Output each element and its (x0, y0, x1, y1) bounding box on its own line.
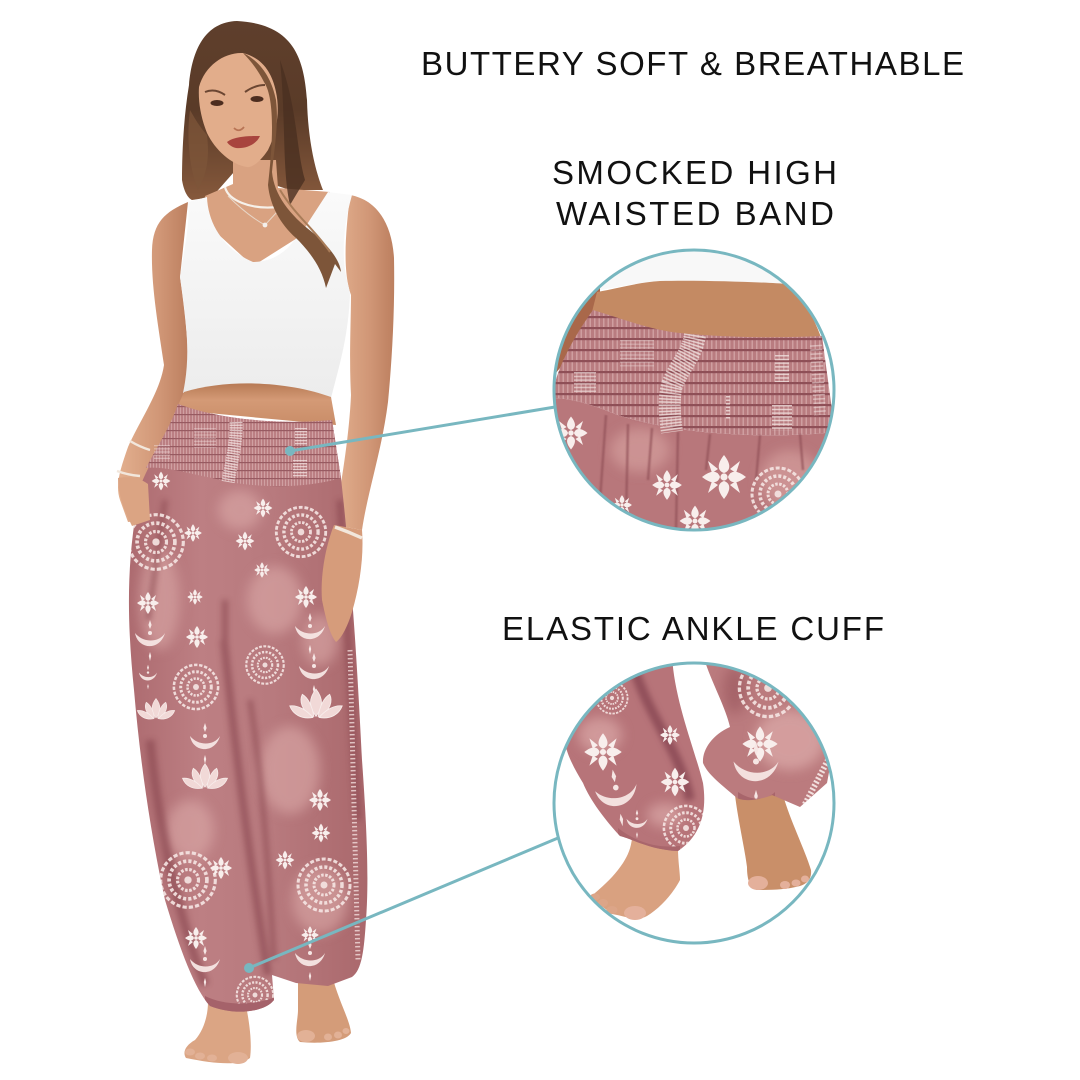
print motifs (129, 472, 350, 1013)
arm behind (556, 288, 600, 372)
smocked waistband (146, 404, 341, 486)
left foot close-up (590, 838, 680, 920)
midriff skin (592, 280, 820, 338)
left foot (184, 1002, 251, 1064)
right hand (322, 525, 363, 642)
model figure (117, 21, 394, 1064)
white crop top (180, 192, 352, 398)
harem pants (129, 404, 367, 1020)
right arm (334, 195, 394, 530)
right foot close-up (735, 795, 811, 890)
mottling and gathers (610, 428, 820, 510)
fabric below band (556, 398, 826, 528)
waistband print (162, 422, 301, 482)
heading: elastic ankle cuff: ELASTIC ANKLE CUFF (502, 610, 884, 647)
right foot (296, 975, 351, 1043)
detail circle: waistband close-up (545, 240, 840, 540)
ankle cuffs (205, 996, 274, 1012)
hair front lock (188, 53, 341, 288)
infographic canvas (116, 21, 963, 1064)
right pant leg (702, 665, 829, 807)
detail circle: ankle cuff close-up (552, 662, 836, 944)
left pant leg (566, 666, 704, 851)
pocket hand (118, 477, 150, 526)
fold shadows (148, 500, 358, 985)
face (199, 53, 278, 167)
chest and neck (205, 160, 330, 266)
callout line: waistband (285, 407, 555, 456)
necklaces (225, 187, 278, 227)
heading: smocked high waisted band (552, 154, 837, 232)
heading: smocked high waisted band: WAISTED BAND (556, 195, 834, 232)
band print (585, 335, 820, 432)
top hem (600, 240, 790, 290)
callout line: ankle cuff (244, 838, 558, 973)
eyes, brows, nose and lips (205, 85, 265, 148)
left arm (118, 202, 188, 522)
side trim (350, 650, 358, 960)
bracelets (117, 441, 362, 538)
midriff (176, 383, 336, 425)
heading: smocked high waisted band: SMOCKED HIGH (552, 154, 837, 191)
heading: buttery soft and breathable: BUTTERY SOFT & BREATHABLE (421, 45, 964, 82)
smocked band (552, 310, 835, 435)
hair back (182, 21, 323, 200)
tie-dye mottling (140, 490, 348, 934)
close-up motifs (559, 416, 588, 450)
